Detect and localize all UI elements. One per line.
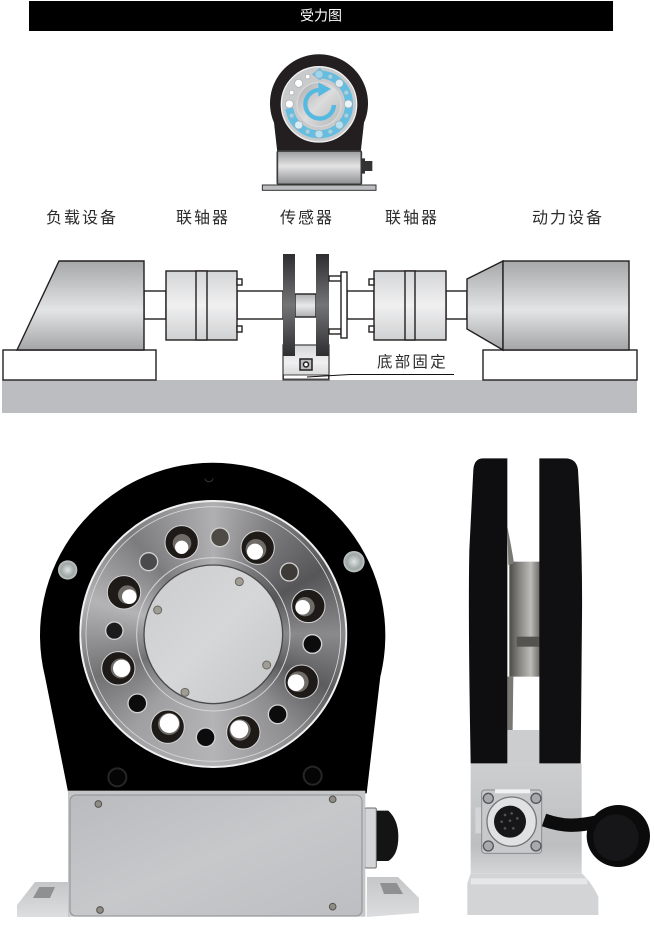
- right black plate: [539, 458, 582, 763]
- foot: [467, 873, 598, 915]
- shafts: [144, 291, 467, 319]
- label: sensor: 传感器: [280, 209, 334, 227]
- schematic: drive train: [2, 254, 637, 413]
- callout text: 底部固定: [377, 353, 448, 371]
- connector screws: [483, 793, 541, 851]
- right coupling: [369, 271, 446, 340]
- foot highlight: [471, 878, 587, 884]
- connector knob: [374, 811, 398, 861]
- left black plate: [469, 458, 507, 763]
- lower bolts: [108, 767, 322, 786]
- sensor housing: [277, 151, 361, 184]
- mounting holes: [285, 70, 352, 138]
- plate screws: [154, 578, 271, 696]
- power device: [467, 261, 629, 350]
- blue load ring: [289, 74, 349, 134]
- sensor black body: [270, 54, 368, 152]
- centre plate: [137, 558, 290, 711]
- load device: [17, 261, 144, 350]
- flange: [329, 272, 347, 338]
- header bar: [29, 1, 613, 31]
- photo: sensor front view: [17, 463, 419, 917]
- connector cap: [587, 805, 650, 867]
- box screws: [95, 796, 336, 913]
- icon: torque sensor with rotation arrow: [262, 54, 376, 190]
- sensor connector: [362, 158, 372, 174]
- sensor base plate: [262, 185, 376, 190]
- rotation arrow: [305, 82, 334, 119]
- power device base: [483, 350, 637, 380]
- centre shaft: [509, 562, 540, 677]
- connector chrome: [365, 808, 376, 868]
- lower bracket: [507, 730, 539, 765]
- label: power device: 动力设备: [532, 209, 604, 227]
- left foot: [17, 882, 70, 917]
- right foot: [367, 877, 419, 917]
- foot slots: [33, 883, 403, 898]
- metal ring: [79, 500, 347, 768]
- housing box: [68, 791, 365, 917]
- connector flange: [482, 790, 542, 853]
- heading: 受力图: 受力图: [300, 8, 342, 24]
- flange edge: [507, 527, 514, 733]
- ring outer groove: [86, 507, 341, 761]
- large holes: [102, 526, 325, 749]
- glossy bolts: [58, 551, 365, 580]
- torque sensor: [283, 254, 329, 380]
- box cover plate: [70, 795, 362, 916]
- connector side tab: [475, 807, 483, 833]
- callout line: [307, 374, 454, 377]
- ground: [2, 380, 637, 413]
- load base: [3, 350, 156, 380]
- label: coupling right: 联轴器: [385, 209, 439, 227]
- schematic labels: [46, 209, 604, 227]
- connector socket: [487, 797, 536, 846]
- cable: [544, 820, 598, 825]
- flange notch: [495, 789, 530, 793]
- black body: [40, 463, 385, 793]
- label: load device: 负载设备: [46, 209, 118, 227]
- photo: sensor side view: [467, 458, 650, 915]
- shaft groove: [517, 637, 540, 647]
- centre plate: [297, 82, 341, 126]
- sensor metal disc: [281, 67, 357, 142]
- label: coupling left: 联轴器: [176, 209, 230, 227]
- left coupling: [166, 271, 242, 340]
- small holes: [106, 528, 322, 747]
- bracket body: [471, 763, 582, 873]
- top screw: [205, 478, 213, 482]
- blue ring arrowhead: [312, 68, 325, 80]
